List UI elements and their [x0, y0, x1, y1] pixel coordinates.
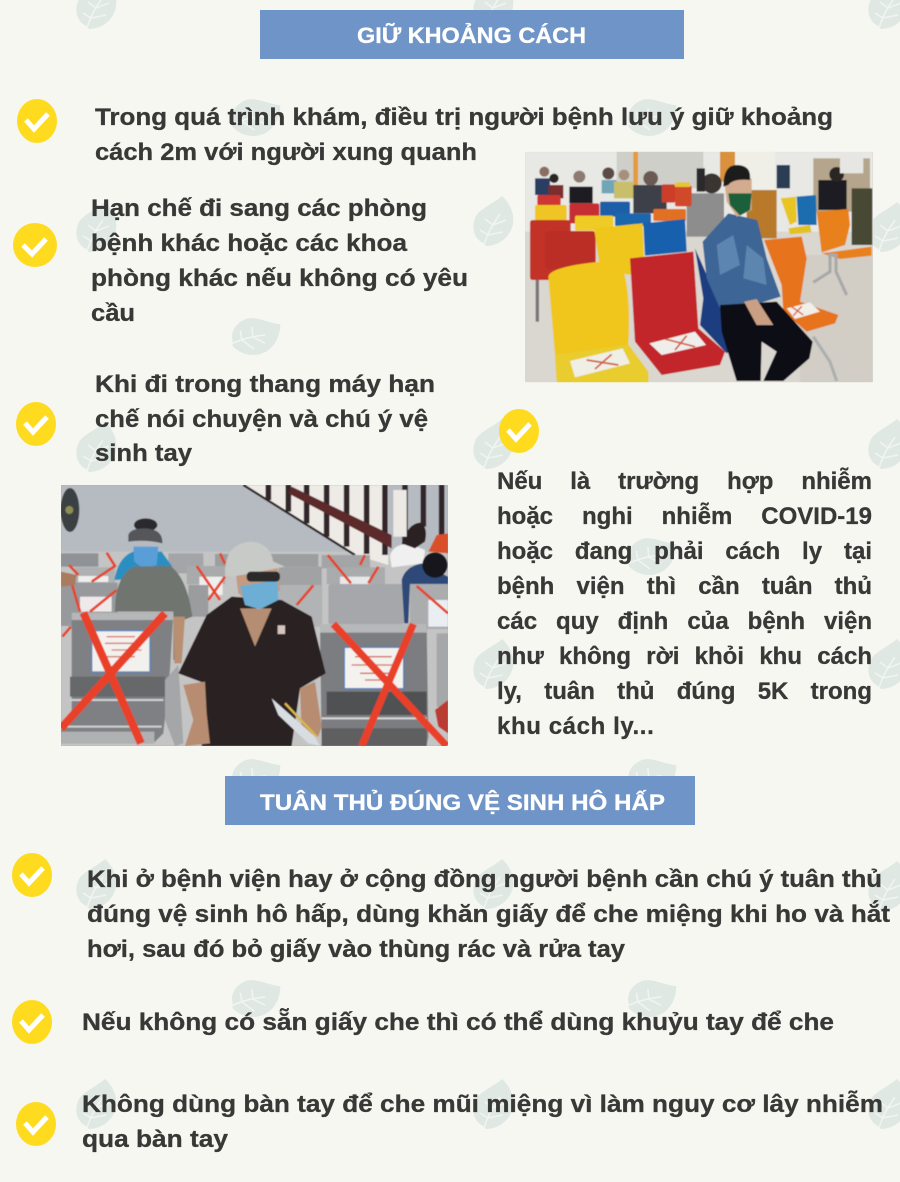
- heading: tuân thủ đúng vệ sinh hô hấp: TUÂN THỦ ĐÚNG VỆ SINH HÔ HẤP: [260, 790, 665, 815]
- red chair: [630, 252, 725, 375]
- text block: confirmed or suspected COVID-19 cases: Nếu là trường hợp nhiễm: [497, 468, 872, 495]
- bullet: avoid other rooms: [13, 195, 468, 327]
- bullet: use elbow: Nếu không có sẵn giấy che thì có thể dùng khuỷu tay để che: [82, 1008, 834, 1036]
- photo: man in mask on taped-off seats: [61, 485, 448, 746]
- front left seat: [61, 613, 173, 743]
- rear chairs: [537, 195, 561, 206]
- bullet: avoid other rooms: bệnh khác hoặc các khoa: [91, 230, 408, 257]
- bullet: in elevators: chế nói chuyện và chú ý vệ: [95, 406, 428, 433]
- chair frame beside man: [165, 665, 183, 746]
- man front: [178, 597, 326, 746]
- text block: confirmed or suspected COVID-19 cases: bệnh viện thì cần tuân thủ: [497, 573, 872, 600]
- bullet: in elevators: [16, 371, 435, 467]
- heading: tuân thủ đúng vệ sinh hô hấp: [225, 776, 695, 825]
- bullet: respiratory hygiene: Khi ở bệnh viện hay ở cộng đồng người bệnh cần chú ý tuân thủ: [87, 866, 882, 893]
- text block: confirmed or suspected COVID-19 cases: hoặc đang phải cách ly tại: [497, 538, 872, 565]
- yellow chair: [548, 260, 648, 382]
- red tape back: [62, 553, 448, 637]
- heading: giữ khoảng cách: [260, 10, 684, 59]
- bullet: in elevators: Khi đi trong thang máy hạn: [95, 371, 435, 398]
- text block: confirmed or suspected COVID-19 cases: ly, tuân thủ đúng 5K trong: [497, 678, 872, 705]
- bullet icon: confirmed cases: [499, 409, 539, 453]
- main orange chair: [764, 237, 838, 332]
- man: [694, 248, 729, 354]
- text block: confirmed or suspected COVID-19 cases: hoặc nghi nhiễm COVID-19: [497, 503, 872, 530]
- photo: waiting room with colored chairs: [525, 152, 873, 382]
- text block: confirmed or suspected COVID-19 cases: khu cách ly...: [497, 713, 654, 740]
- bullet: in elevators: sinh tay: [95, 440, 193, 467]
- back row: [61, 553, 98, 567]
- text block: confirmed or suspected COVID-19 cases: [497, 467, 872, 740]
- bullet: avoid other rooms: Hạn chế đi sang các phòng: [91, 195, 427, 222]
- bullet: do not use hands: [16, 1090, 883, 1153]
- left legs: [535, 279, 540, 322]
- bullet: do not use hands: Không dùng bàn tay để che mũi miệng vì làm nguy cơ lây nhiễm: [82, 1090, 883, 1118]
- people back: [114, 552, 172, 580]
- heading: giữ khoảng cách: GIỮ KHOẢNG CÁCH: [357, 23, 586, 48]
- bullet: keep 2m distance: [17, 99, 833, 166]
- bullet: do not use hands: qua bàn tay: [82, 1126, 229, 1153]
- text block: confirmed or suspected COVID-19 cases: các quy định của bệnh viện: [497, 608, 872, 635]
- background people: [535, 178, 550, 195]
- front right seat: [320, 624, 428, 746]
- bullet: keep 2m distance: Trong quá trình khám, điều trị người bệnh lưu ý giữ khoảng: [95, 104, 833, 131]
- bullet: respiratory hygiene: [12, 853, 890, 963]
- text block: confirmed or suspected COVID-19 cases: như không rời khỏi khu cách: [497, 643, 872, 670]
- bullet: respiratory hygiene: đúng vệ sinh hô hấp, dùng khăn giấy để che miệng khi ho và hắt: [87, 900, 890, 928]
- bullet: use elbow: [12, 1000, 834, 1044]
- right orange chair: [817, 209, 850, 252]
- bullet: avoid other rooms: phòng khác nếu không có yêu: [91, 265, 468, 292]
- bullet: avoid other rooms: cầu: [91, 300, 135, 327]
- bullet: keep 2m distance: cách 2m với người xung quanh: [95, 139, 477, 166]
- bullet: respiratory hygiene: hơi, sau đó bỏ giấy vào thùng rác và rửa tay: [87, 936, 626, 963]
